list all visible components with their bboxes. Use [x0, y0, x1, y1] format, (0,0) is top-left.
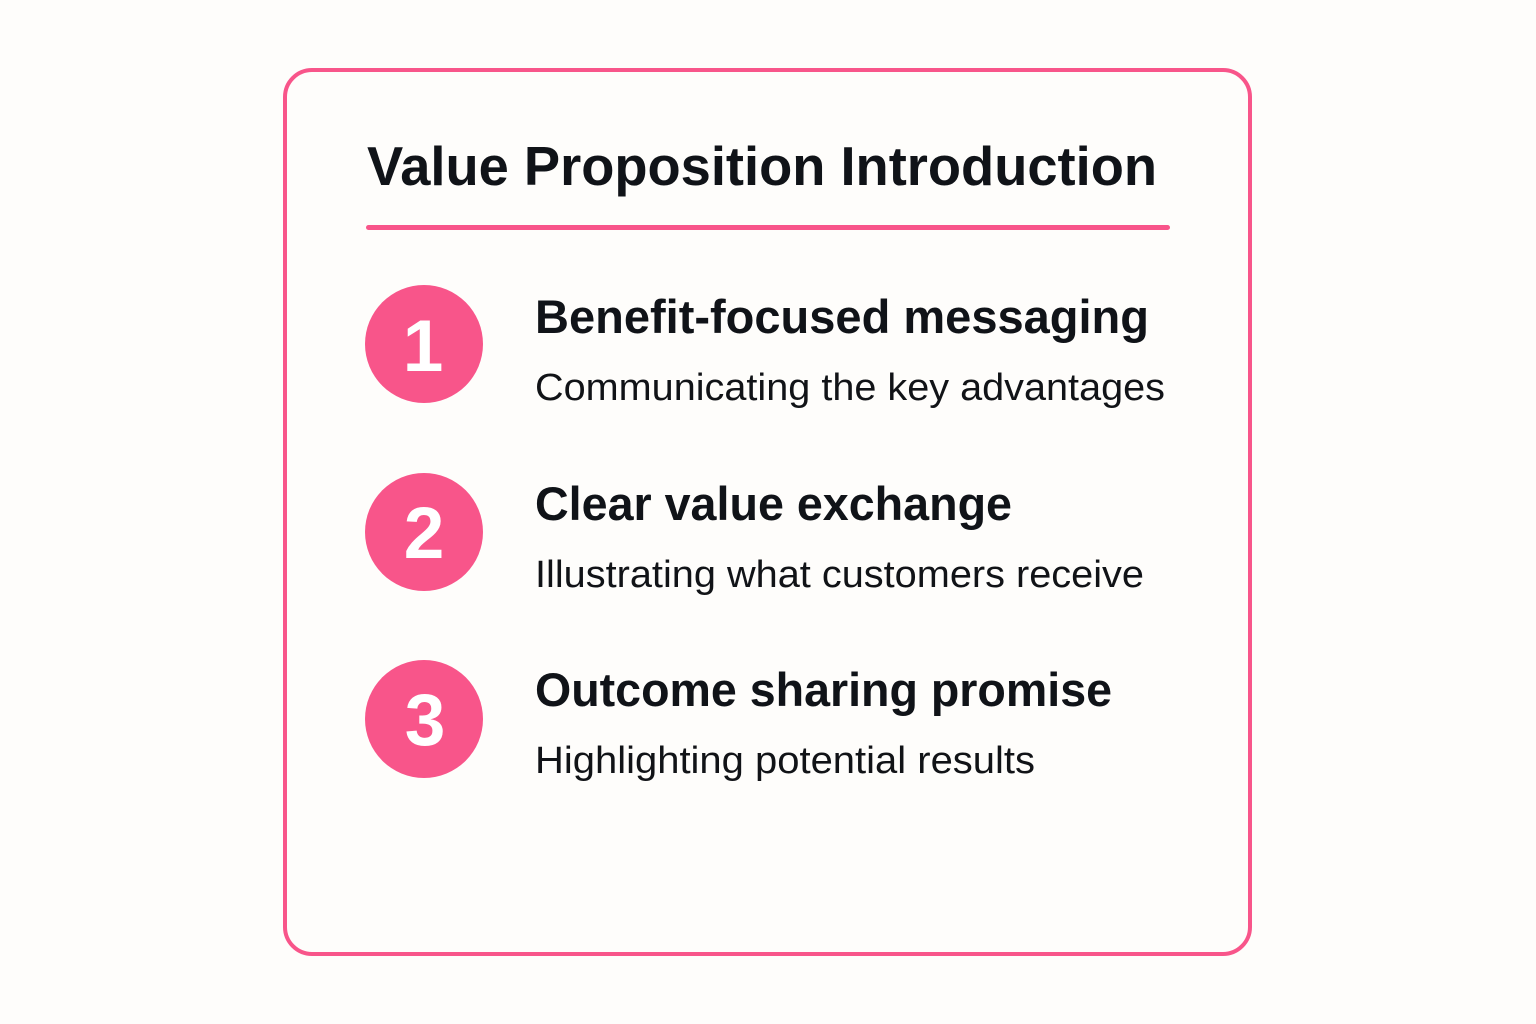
title underline [366, 225, 1170, 230]
icon: number 2 badge: 2 [404, 493, 444, 574]
item 3 [365, 660, 1112, 782]
panel: value proposition card [285, 70, 1250, 954]
heading: benefit-focused messaging: Benefit-focused messaging [535, 290, 1149, 343]
description: illustrating what customers receive: Illustrating what customers receive [535, 554, 1144, 596]
item 1 [365, 285, 1165, 409]
icon: number 1 badge: 1 [403, 306, 443, 387]
icon: number 2 badge [365, 473, 483, 591]
item 2 [365, 473, 1144, 596]
description: highlighting potential results: Highlighting potential results [535, 740, 1035, 782]
icon: number 3 badge: 3 [405, 680, 445, 761]
description: communicating the key advantages: Communicating the key advantages [535, 367, 1165, 409]
icon: number 3 badge [365, 660, 483, 778]
heading: clear value exchange: Clear value exchange [535, 477, 1012, 530]
title: Value Proposition Introduction [367, 135, 1157, 197]
heading: outcome sharing promise: Outcome sharing promise [535, 663, 1112, 716]
icon: number 1 badge [365, 285, 483, 403]
